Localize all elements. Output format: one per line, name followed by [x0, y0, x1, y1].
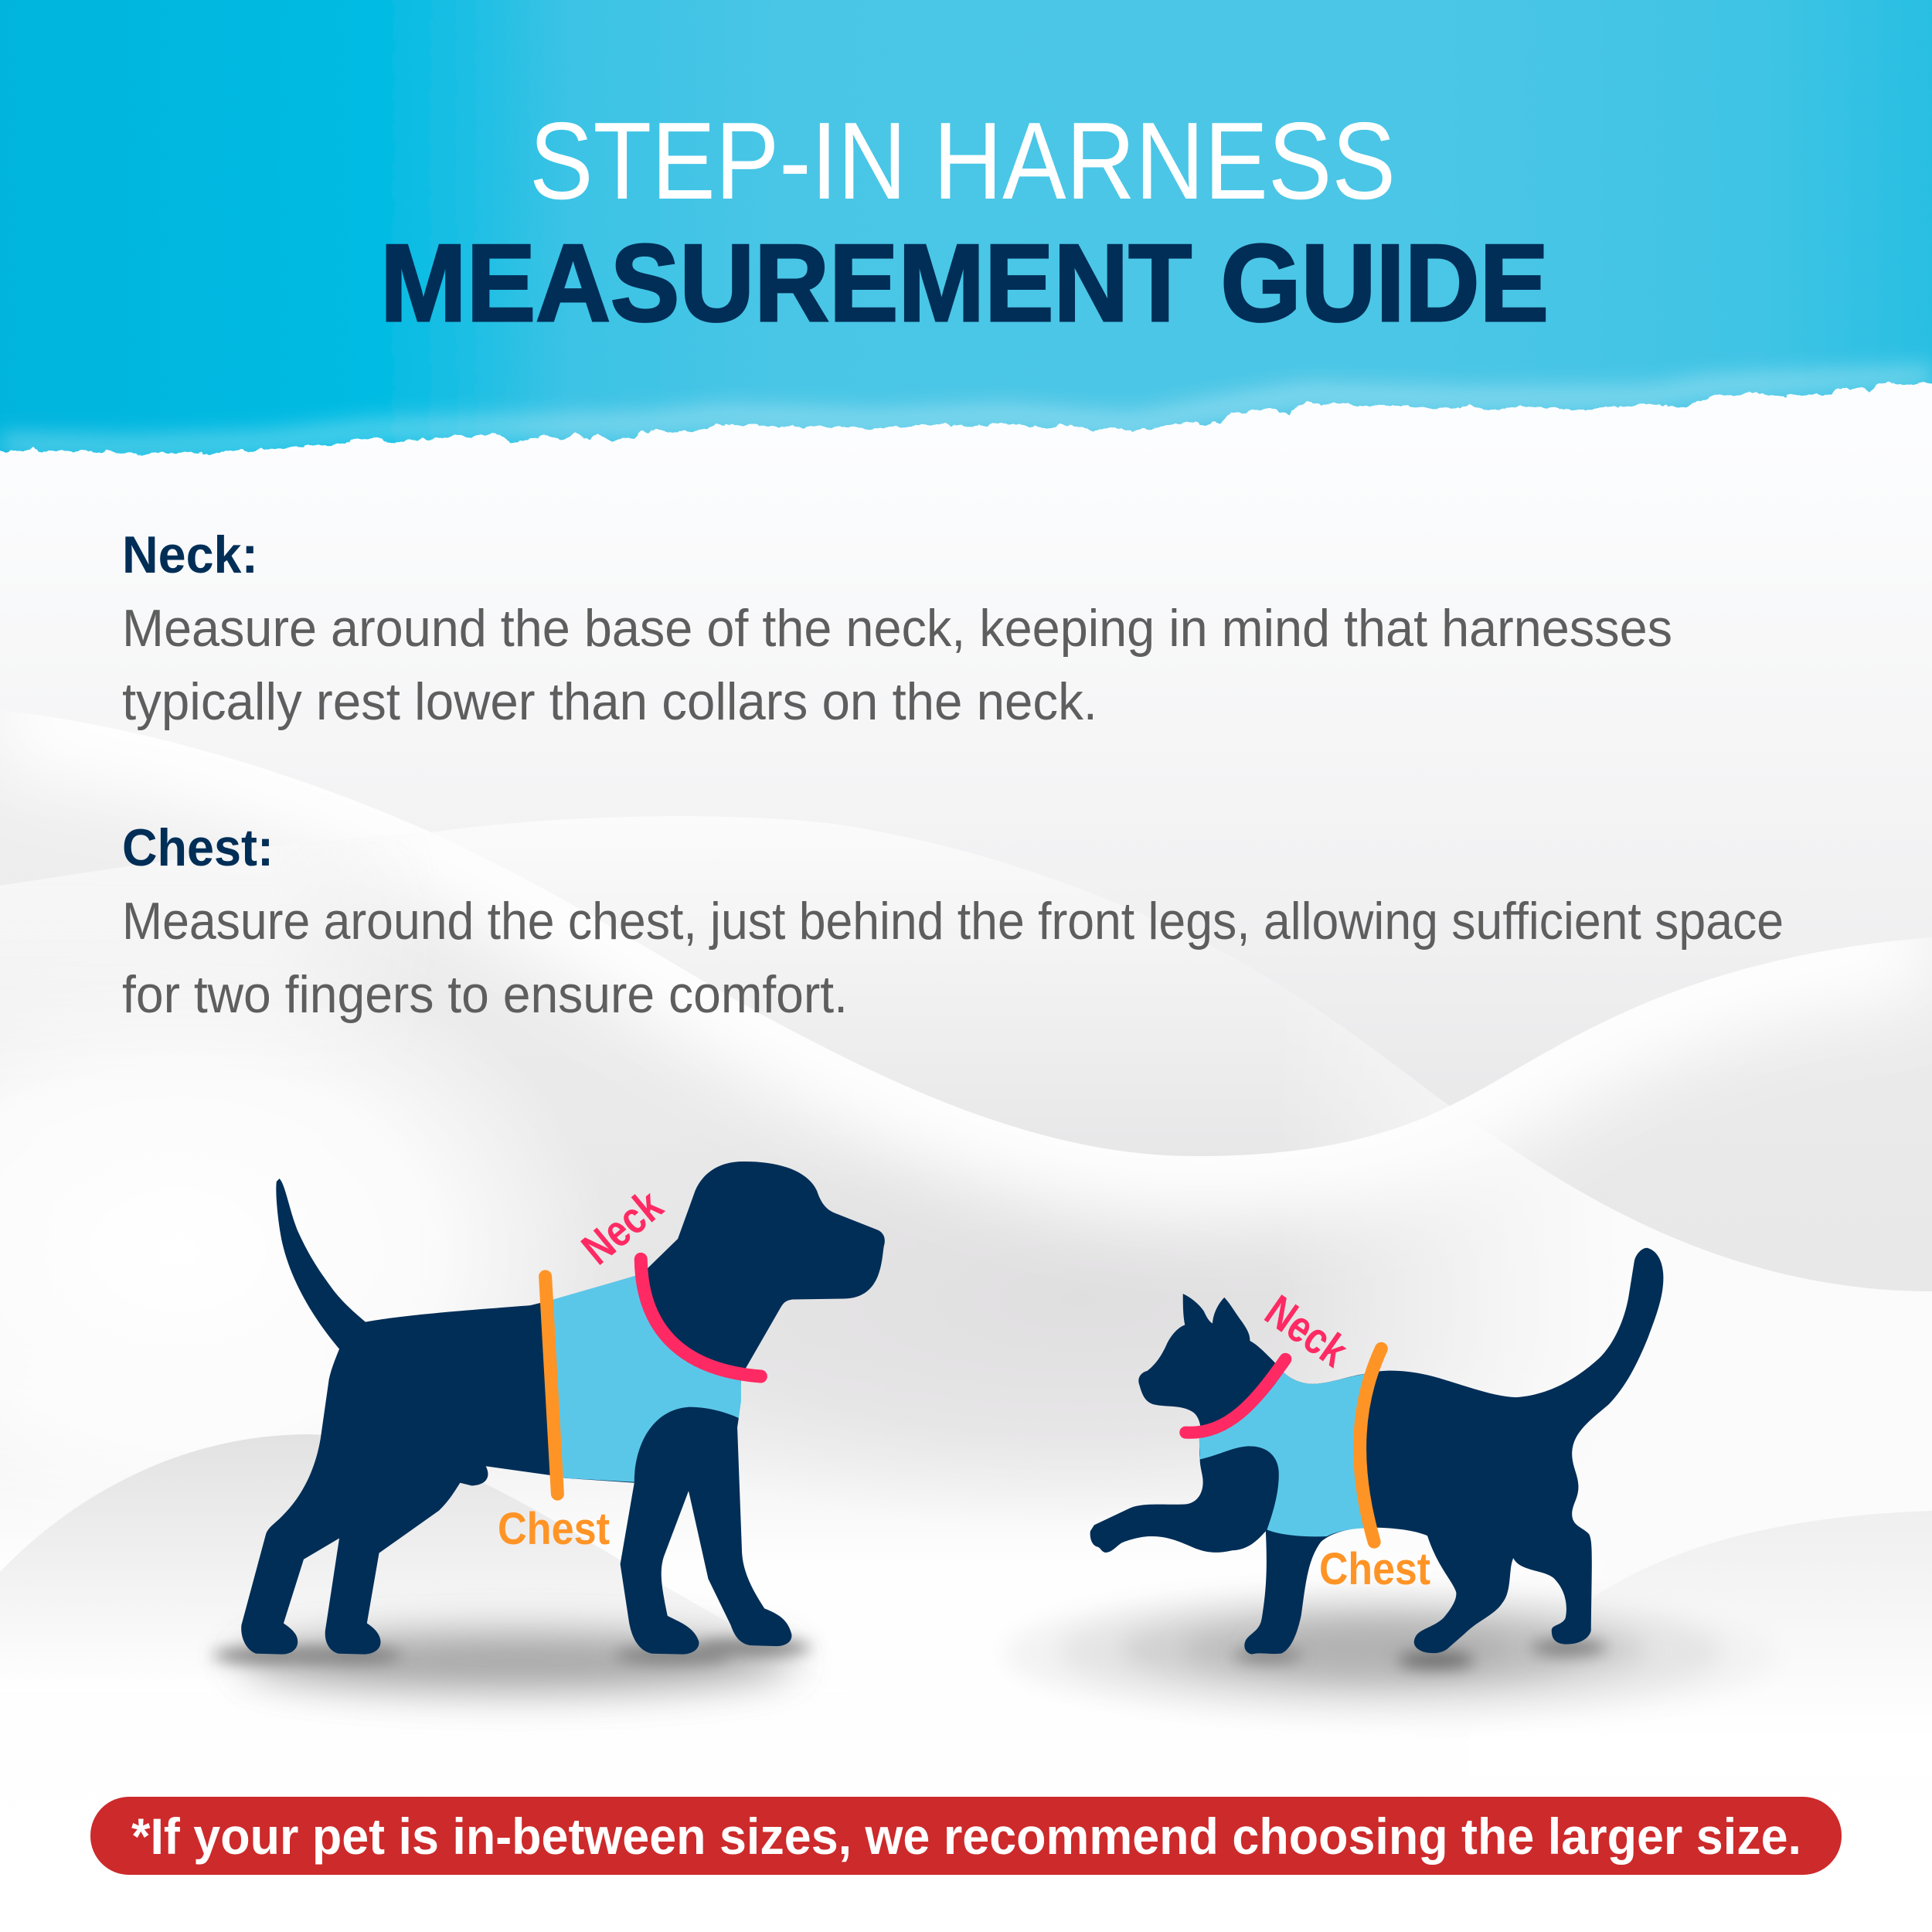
dog ground shadow: [213, 1632, 811, 1691]
cat harness vest: [1199, 1372, 1370, 1536]
heading: neck: Neck:: [122, 526, 258, 584]
dog label: neck: Neck: [573, 1180, 672, 1274]
title: [380, 100, 1549, 345]
torn edge highlight: [0, 376, 1932, 447]
dog neck measure line: [641, 1259, 760, 1376]
callout banner: [90, 1797, 1842, 1875]
dog harness vest: [546, 1276, 741, 1482]
chest instructions line 1: Measure around the chest, just behind the front legs, allowing sufficient space: [122, 892, 1784, 951]
cat illustration: [1090, 1248, 1663, 1655]
header band: torn blue paper: [0, 0, 1932, 454]
neck instructions line 1: Measure around the base of the neck, keeping in mind that harnesses: [122, 599, 1672, 658]
text block: neck: [122, 526, 1672, 731]
cat body: [1090, 1248, 1663, 1655]
cat label: neck: Neck: [1257, 1285, 1357, 1377]
heading: chest: Chest:: [122, 818, 274, 877]
neck instructions line 2: typically rest lower than collars on the neck.: [122, 672, 1097, 731]
dog label: chest: Chest: [498, 1504, 610, 1554]
dog illustration: [241, 1162, 885, 1655]
banner text: *If your pet is in-between sizes, we recommend choosing the larger size.: [131, 1808, 1801, 1865]
cat silhouette: [1090, 1248, 1663, 1655]
dog chest measure line: [546, 1277, 557, 1494]
title line 1: STEP-IN HARNESS: [529, 100, 1396, 223]
dog body: [241, 1162, 885, 1655]
cat label: chest: Chest: [1319, 1544, 1430, 1594]
text block: chest: [122, 818, 1784, 1024]
cat neck measure line: [1185, 1359, 1285, 1433]
background: white and grey waves: [0, 675, 1932, 1623]
cat ground shadow: [1005, 1586, 1777, 1722]
chest instructions line 2: for two fingers to ensure comfort.: [122, 965, 848, 1024]
cat chest measure line: [1360, 1349, 1381, 1542]
banner pill: [90, 1797, 1842, 1875]
dog silhouette: [241, 1162, 885, 1655]
title line 2: MEASUREMENT GUIDE: [380, 222, 1549, 345]
